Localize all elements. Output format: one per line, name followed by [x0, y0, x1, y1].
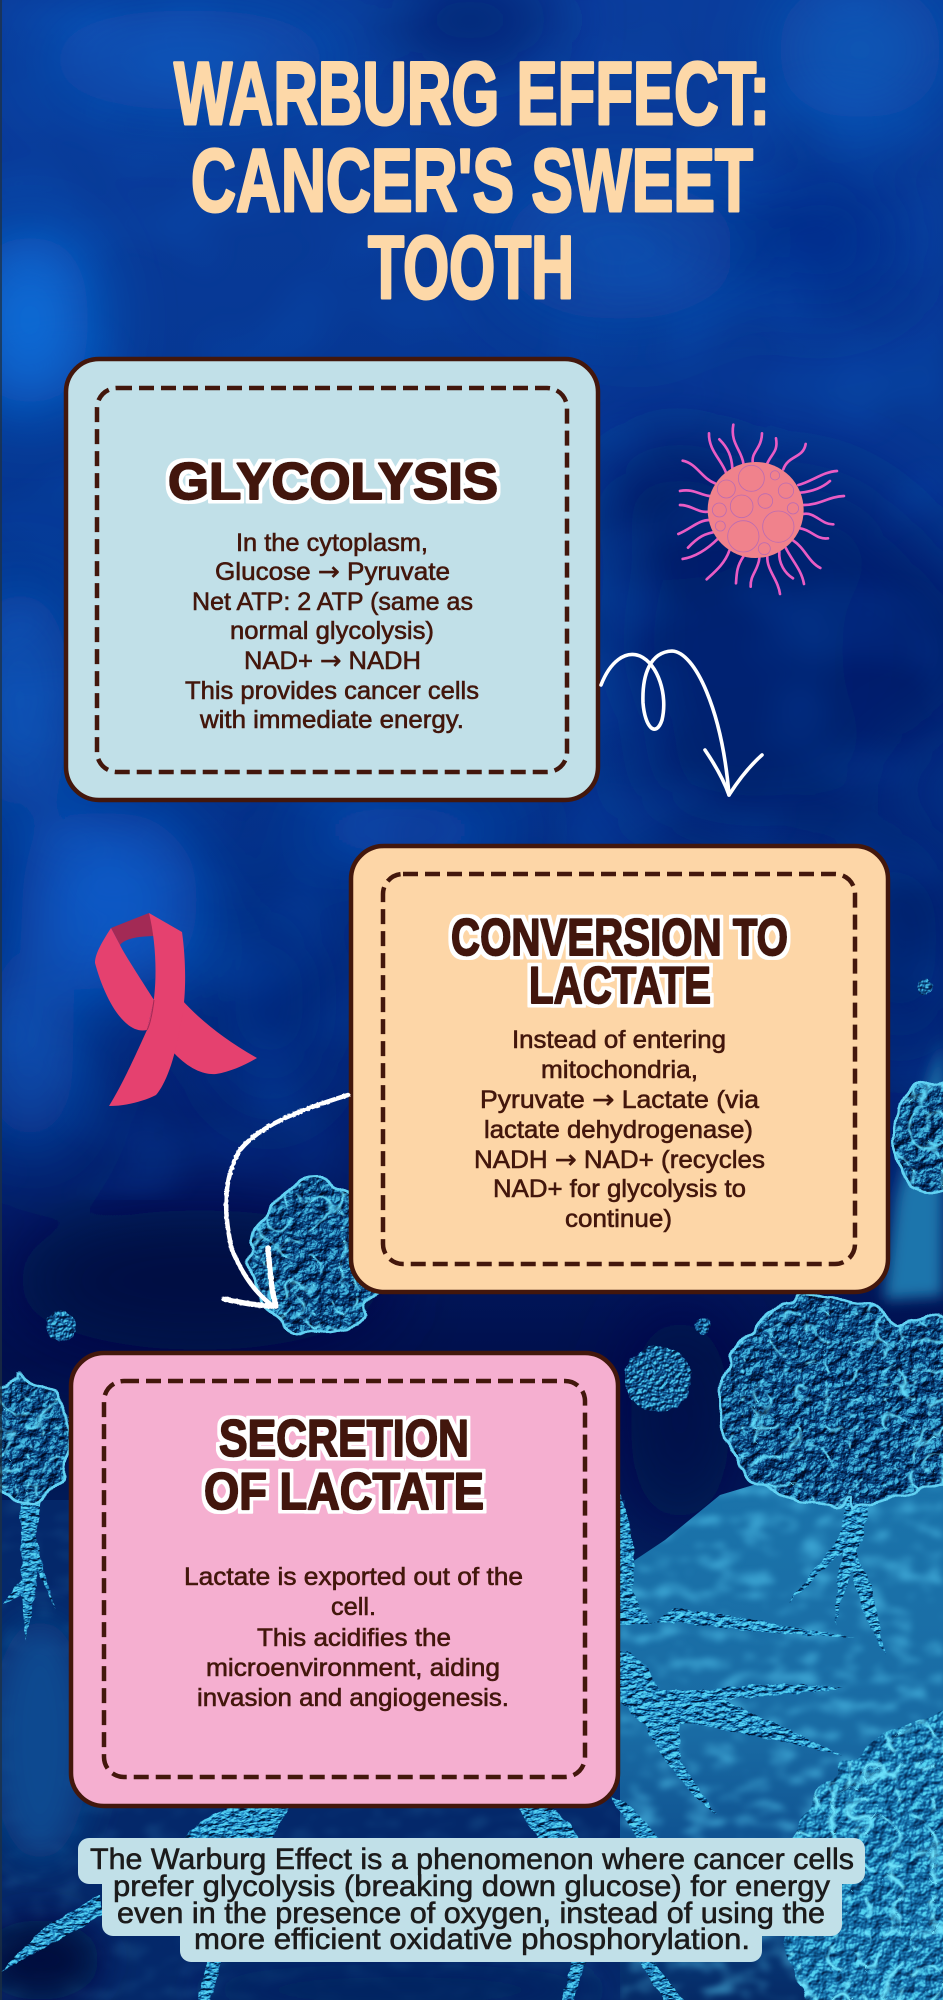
cancer cell: large bottom right — [780, 1710, 943, 2000]
icon: pink awareness ribbon — [95, 913, 257, 1106]
small floating cell centre — [695, 1318, 711, 1334]
conversion text: Instead of entering — [512, 1026, 726, 1054]
footer text: even in the presence of oxygen, instead of using the — [117, 1897, 825, 1930]
glycolysis text: normal glycolysis) — [230, 617, 434, 645]
footer text: prefer glycolysis (breaking down glucose) for energy — [113, 1870, 830, 1903]
heading: secretion of lactate: SECRETION — [219, 1410, 469, 1468]
glycolysis text: This provides cancer cells — [185, 677, 479, 705]
conversion text: lactate dehydrogenase) — [484, 1116, 753, 1144]
footer text — [90, 1843, 854, 1956]
panel: glycolysis — [66, 359, 598, 800]
heading: glycolysis: GLYCOLYSIS — [168, 453, 498, 511]
glycolysis text: Net ATP: 2 ATP (same as — [192, 588, 473, 616]
heading: conversion to lactate: LACTATE — [529, 957, 711, 1015]
small cell near secretion card — [625, 1346, 691, 1412]
cancer cell: left edge — [0, 1376, 73, 1504]
heading: conversion to lactate: CONVERSION TO — [451, 909, 788, 967]
title: TOOTH — [368, 217, 574, 317]
panel: conversion to lactate — [351, 846, 888, 1292]
textured tissue on lower right — [0, 1040, 943, 2000]
glycolysis text: with immediate energy. — [199, 706, 464, 734]
heading: conversion to lactate — [451, 909, 788, 1015]
glycolysis text: In the cytoplasm, — [236, 529, 428, 557]
tendrils — [0, 1490, 885, 2000]
cancer cell: right edge — [892, 1078, 943, 1194]
cancer cell: large upper right — [719, 1294, 943, 1510]
secretion text: cell. — [331, 1593, 376, 1621]
conversion text: continue) — [565, 1205, 672, 1233]
heading: secretion of lactate: OF LACTATE — [204, 1463, 484, 1521]
footer text: more efficient oxidative phosphorylation. — [194, 1923, 750, 1956]
heading: secretion of lactate — [204, 1410, 484, 1521]
glycolysis text: NAD+ → NADH — [244, 646, 421, 675]
panel: secretion of lactate — [71, 1353, 618, 1806]
title — [174, 43, 770, 317]
icon: pink virus cell — [678, 425, 844, 594]
conversion text: NADH → NAD+ (recycles — [474, 1145, 765, 1174]
glycolysis text — [185, 529, 479, 734]
arrow: conversion to secretion — [224, 1095, 348, 1307]
secretion text: invasion and angiogenesis. — [197, 1684, 509, 1712]
conversion text — [474, 1026, 765, 1233]
small floating cell left — [46, 1311, 76, 1341]
small floating cell right — [917, 979, 933, 995]
conversion text: NAD+ for glycolysis to — [493, 1175, 746, 1203]
arrow: glycolysis to conversion — [601, 651, 762, 795]
footer callout — [78, 1838, 865, 1962]
secretion text: Lactate is exported out of the — [184, 1563, 523, 1591]
footer text: The Warburg Effect is a phenomenon where cancer cells — [90, 1843, 854, 1876]
conversion text: mitochondria, — [541, 1056, 698, 1084]
glycolysis text: Glucose → Pyruvate — [215, 557, 450, 586]
secretion text: microenvironment, aiding — [206, 1654, 500, 1682]
secretion text — [184, 1563, 523, 1712]
cancer cell: behind conversion card — [250, 1179, 390, 1335]
conversion text: Pyruvate → Lactate (via — [480, 1085, 759, 1114]
secretion text: This acidifies the — [257, 1624, 451, 1652]
